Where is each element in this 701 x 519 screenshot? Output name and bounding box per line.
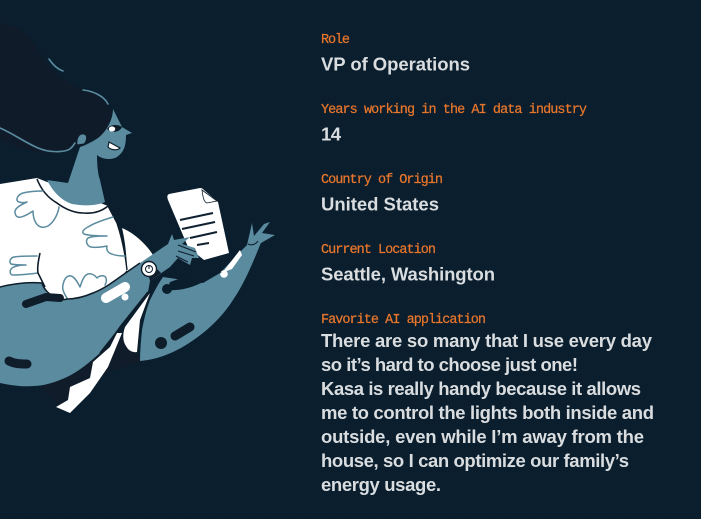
shirt ruffles	[10, 191, 125, 298]
collar	[37, 179, 108, 213]
favorite application answer: There are so many that I use every day	[321, 330, 653, 351]
location label: Current Location	[321, 243, 436, 258]
favorite application answer	[321, 330, 654, 495]
finger lines	[176, 245, 196, 262]
far arm	[140, 222, 275, 361]
favorite application answer: house, so I can optimize our family’s	[321, 450, 629, 471]
eye	[107, 125, 122, 132]
white shirt	[0, 178, 127, 302]
sleeve outline	[0, 263, 148, 353]
white cloth between arms	[123, 293, 150, 352]
document	[167, 188, 229, 260]
underarm crease	[38, 253, 45, 287]
years label: Years working in the AI data industry	[321, 103, 587, 118]
torn white cloth	[56, 333, 122, 413]
ear	[77, 134, 87, 145]
white sleeve piece behind arm	[122, 228, 153, 272]
favorite application answer: energy usage.	[321, 474, 441, 495]
country value: United States	[321, 194, 439, 214]
favorite application answer: outside, even while I’m away from the	[321, 426, 644, 447]
favorite application label: Favorite AI application	[321, 313, 486, 328]
sleeve details	[9, 287, 128, 364]
shadow under body	[40, 335, 142, 408]
far arm details	[155, 241, 258, 349]
neck and face	[47, 109, 132, 205]
shirt side line	[108, 206, 127, 270]
years value: 14	[321, 124, 342, 144]
favorite application answer: me to control the lights both inside and	[321, 402, 654, 423]
mouth	[108, 142, 120, 150]
role value: VP of Operations	[321, 54, 470, 74]
favorite application answer: so it’s hard to choose just one!	[321, 354, 578, 375]
hair highlights	[0, 59, 108, 152]
wristwatch	[142, 262, 161, 281]
favorite application answer: Kasa is really handy because it allows	[321, 378, 641, 399]
country label: Country of Origin	[321, 173, 443, 188]
illustration: woman holding a document	[0, 23, 275, 413]
left sleeve and forearm with hand	[0, 234, 199, 386]
hair	[0, 23, 113, 153]
eye white	[109, 126, 115, 132]
location value: Seattle, Washington	[321, 264, 495, 284]
role label: Role	[321, 33, 350, 48]
